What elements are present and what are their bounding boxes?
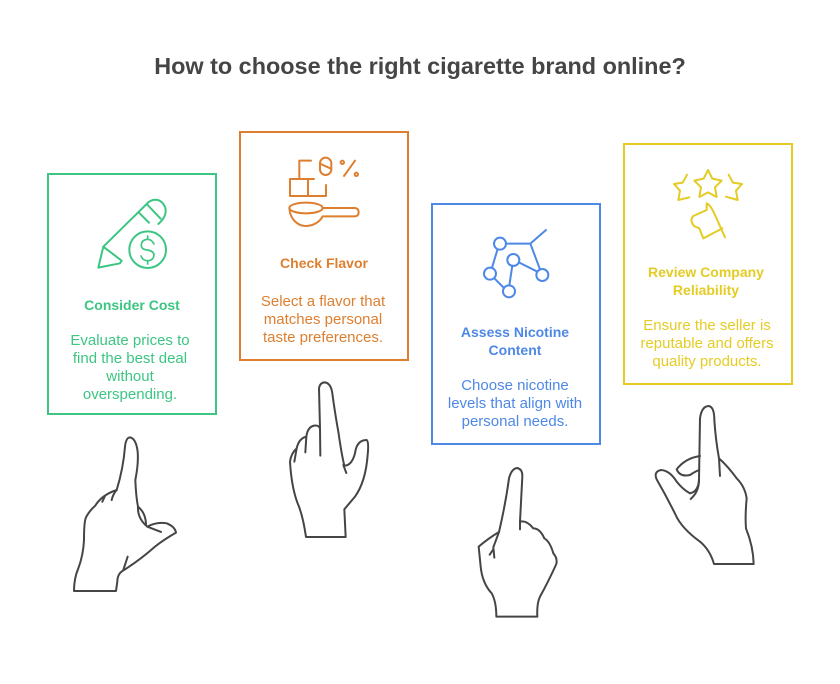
- hand 1: [74, 437, 176, 591]
- hand 4: [656, 406, 754, 564]
- heading: assess nicotine content: Assess Nicotine: [461, 324, 569, 340]
- body: consider cost: without: [106, 368, 154, 385]
- body: check flavor: matches personal: [264, 311, 382, 328]
- body: review company reliability: [640, 317, 774, 370]
- body: review company reliability: Ensure the seller is: [643, 317, 771, 334]
- icon: pencil and dollar coin: [98, 200, 166, 268]
- body: review company reliability: reputable and offers: [640, 335, 774, 352]
- text: assess nicotine content: [448, 324, 582, 430]
- heading: assess nicotine content: [461, 324, 569, 358]
- heading: check flavor: Check Flavor: [280, 255, 368, 271]
- panel: consider cost: [47, 173, 217, 415]
- heading: review company reliability: Reliability: [673, 282, 739, 298]
- panel: review company reliability: [623, 143, 793, 385]
- text: check flavor: [261, 255, 386, 346]
- panel: assess nicotine content: [431, 203, 601, 445]
- title: How to choose the right cigarette brand online?: [154, 53, 686, 79]
- heading: review company reliability: [648, 264, 764, 298]
- heading: consider cost: Consider Cost: [84, 297, 180, 313]
- icon: flavor blocks, pill and scoop: [289, 158, 359, 226]
- body: check flavor: Select a flavor that: [261, 293, 385, 310]
- body: consider cost: [70, 332, 190, 403]
- body: assess nicotine content: levels that align with: [448, 395, 582, 412]
- heading: assess nicotine content: Content: [489, 342, 541, 358]
- body: assess nicotine content: Choose nicotine: [461, 377, 569, 394]
- body: review company reliability: quality products.: [652, 353, 762, 370]
- body: consider cost: Evaluate prices to: [70, 332, 190, 349]
- text: consider cost: [70, 297, 190, 403]
- icon: three stars and badge: [674, 170, 742, 238]
- body: assess nicotine content: personal needs.: [462, 413, 568, 430]
- hand 2: [290, 382, 368, 537]
- icon: molecule network: [484, 230, 548, 297]
- body: consider cost: overspending.: [83, 386, 177, 403]
- body: assess nicotine content: [448, 377, 582, 430]
- body: check flavor: taste preferences.: [263, 329, 383, 346]
- body: check flavor: [261, 293, 386, 346]
- panel: check flavor: [239, 131, 409, 361]
- body: consider cost: find the best deal: [73, 350, 187, 367]
- heading: review company reliability: Review Company: [648, 264, 764, 280]
- text: review company reliability: [640, 264, 774, 370]
- hand 3: [479, 468, 557, 617]
